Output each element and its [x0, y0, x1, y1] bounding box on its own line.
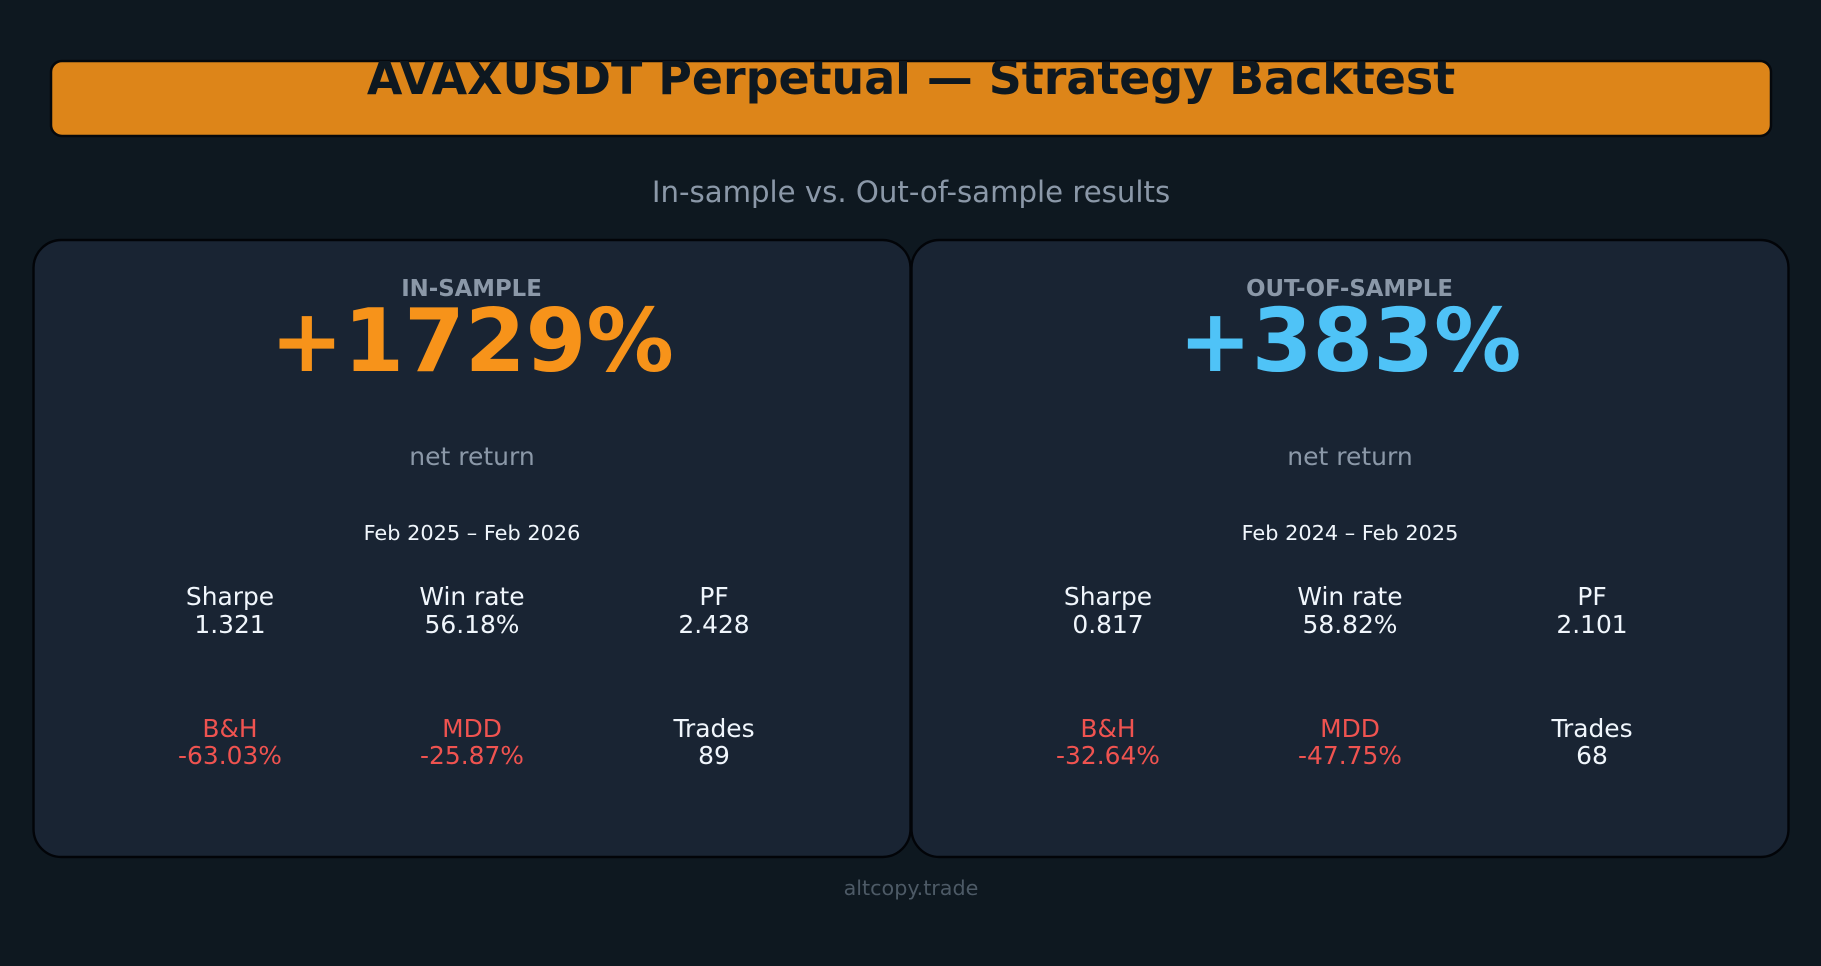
metric: B&H: B&H — [202, 714, 258, 743]
metric: Win rate — [1297, 582, 1403, 639]
panel: out-of-sample — [912, 240, 1788, 857]
date range: Feb 2025 – Feb 2026 — [364, 521, 580, 545]
footer credit: altcopy.trade — [844, 876, 978, 900]
date range: Feb 2024 – Feb 2025 — [1242, 521, 1458, 545]
metric: Win rate: Win rate — [1297, 582, 1403, 611]
metric: Sharpe: Sharpe — [1064, 582, 1152, 611]
metric: PF — [1556, 582, 1628, 639]
title: AVAXUSDT Perpetual — Strategy Backtest — [367, 51, 1455, 105]
metric: MDD: MDD — [442, 714, 502, 743]
metric: Sharpe — [1064, 582, 1152, 639]
metric: MDD — [1298, 714, 1402, 770]
header banner with title — [51, 51, 1771, 136]
metric: Win rate: 58.82% — [1303, 610, 1397, 639]
metric: Trades — [1550, 714, 1633, 770]
metric: Sharpe: Sharpe — [186, 582, 274, 611]
metric: B&H: -63.03% — [178, 741, 282, 770]
metric: B&H — [178, 714, 282, 770]
in-sample net return value: +1729% — [270, 290, 674, 392]
metric: B&H: B&H — [1080, 714, 1136, 743]
metric: B&H — [1056, 714, 1160, 770]
panel: in-sample — [34, 240, 910, 857]
metric: Win rate: 56.18% — [425, 610, 519, 639]
out-of-sample label: OUT-OF-SAMPLE — [1246, 276, 1453, 302]
metric: Trades: 89 — [698, 741, 730, 770]
metric: MDD: -25.87% — [420, 741, 524, 770]
metric: Trades: Trades — [1550, 714, 1633, 743]
metric: PF: 2.101 — [1556, 610, 1628, 639]
metric: PF: PF — [699, 582, 729, 611]
metric: Win rate — [419, 582, 525, 639]
metric: Trades — [672, 714, 755, 770]
subtitle: In-sample vs. Out-of-sample results — [652, 175, 1170, 209]
metric: Sharpe — [186, 582, 274, 639]
metric: MDD: MDD — [1320, 714, 1380, 743]
metric: PF: 2.428 — [678, 610, 750, 639]
in-sample label: IN-SAMPLE — [401, 276, 542, 302]
metric: Sharpe: 1.321 — [194, 610, 266, 639]
out-of-sample net return value: +383% — [1179, 290, 1521, 392]
metric: PF — [678, 582, 750, 639]
metric: MDD — [420, 714, 524, 770]
metric: Win rate: Win rate — [419, 582, 525, 611]
metric: PF: PF — [1577, 582, 1607, 611]
metric: B&H: -32.64% — [1056, 741, 1160, 770]
metric: Trades: Trades — [672, 714, 755, 743]
net return caption: net return — [1287, 442, 1413, 471]
metric: Trades: 68 — [1576, 741, 1608, 770]
metric: Sharpe: 0.817 — [1072, 610, 1144, 639]
net return caption: net return — [409, 442, 535, 471]
metric: MDD: -47.75% — [1298, 741, 1402, 770]
